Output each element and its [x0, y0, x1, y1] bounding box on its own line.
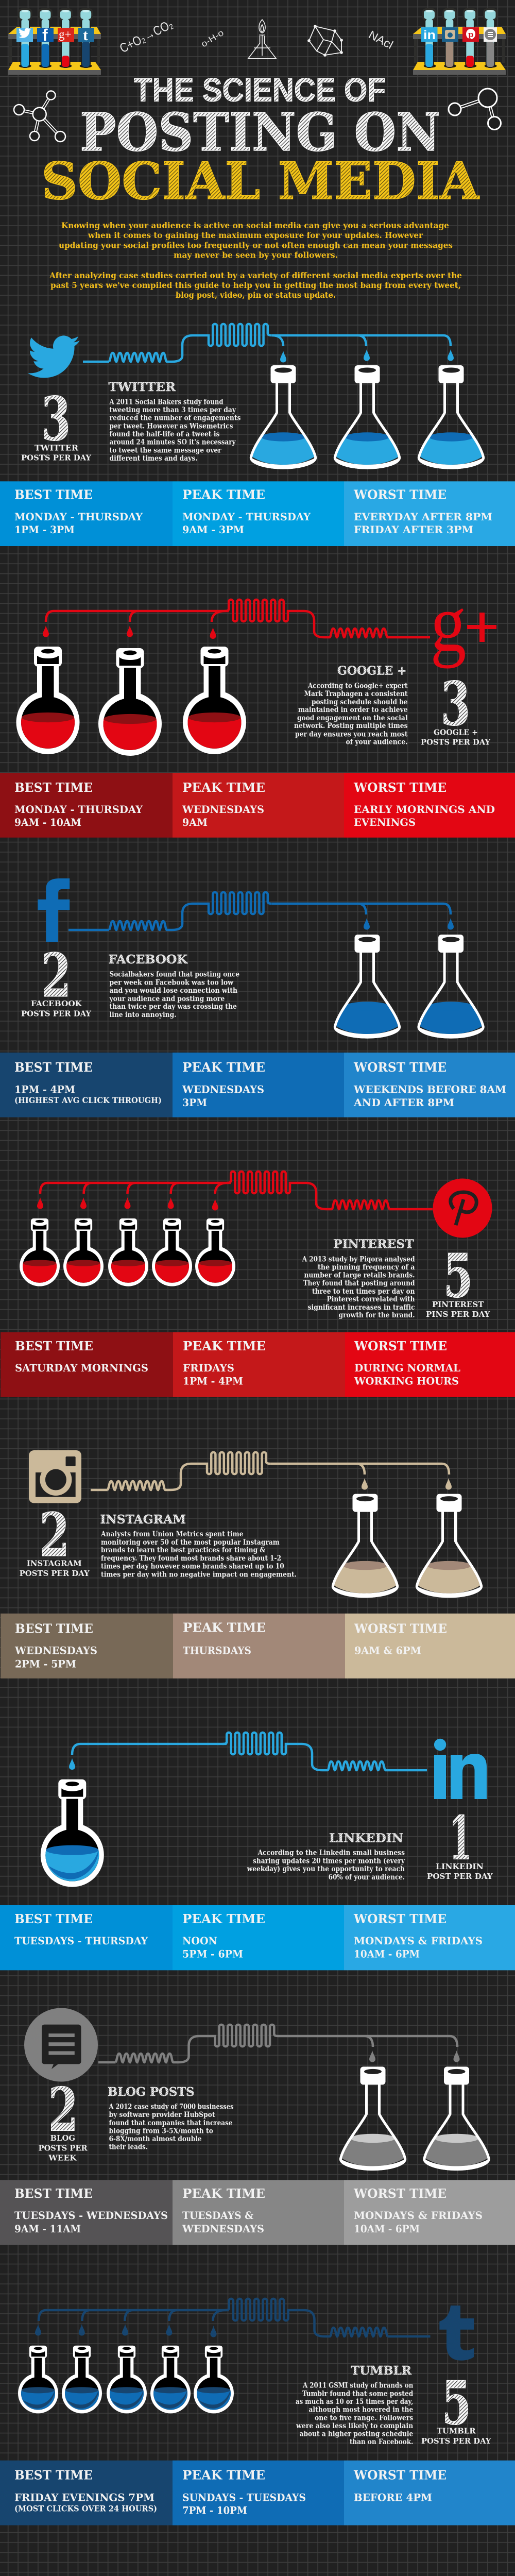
round flasks — [20, 1218, 235, 1286]
timing band: 9AM - 3PM — [182, 524, 244, 536]
body text: A 2011 GSMI study of brands on — [302, 2382, 413, 2390]
chalk doodle: combustion equation: C+O₂→CO₂ — [117, 17, 176, 56]
timing band: 7PM - 10PM — [182, 2504, 247, 2516]
icon: right test tube rack — [413, 8, 506, 75]
timing band: WORST TIME — [354, 1621, 447, 1636]
timing band: (MOST CLICKS OVER 24 HOURS) — [14, 2503, 157, 2513]
body text: 6-8X/month almost double — [109, 2135, 202, 2143]
timing band: (HIGHEST AVG CLICK THROUGH) — [14, 1095, 162, 1105]
timing band: FRIDAY EVENINGS 7PM — [14, 2492, 154, 2503]
body text: reduced the number of engagements — [109, 414, 241, 422]
body text: as much as 10 or 15 times per day, — [296, 2398, 413, 2406]
round flasks — [18, 2346, 234, 2413]
body text: about a higher posting schedule — [300, 2430, 413, 2438]
drops — [362, 1478, 452, 1490]
stat: 5 pins per day — [426, 1241, 490, 1319]
body text: three to ten times per day on — [312, 1287, 415, 1296]
timing band: THURSDAYS — [183, 1645, 251, 1656]
drops — [280, 349, 454, 363]
icon: right test tube rack: in — [423, 28, 436, 42]
timing band: BEST TIME — [14, 487, 93, 502]
coil tube — [83, 324, 451, 362]
body text: significant increases in traffic — [308, 1303, 415, 1312]
body text — [109, 971, 239, 1019]
drops — [35, 2324, 216, 2337]
drops — [364, 918, 454, 929]
timing band: WORST TIME — [353, 1060, 447, 1075]
stat: 3 posts per day: 3 — [41, 384, 71, 454]
body text: A 2013 study by Piqora analysed — [302, 1255, 415, 1263]
icon: google plus — [431, 577, 496, 669]
icon: tumblr t — [439, 2306, 474, 2361]
body text: their leads. — [109, 2143, 148, 2151]
panel: linkedin — [0, 1733, 515, 1970]
timing band: BEST TIME — [14, 780, 93, 795]
icon: left test tube rack: t — [83, 27, 88, 44]
body text: by software provider HubSpot — [109, 2111, 215, 2119]
flasks — [334, 935, 485, 1039]
stat: 5 posts per day — [421, 2368, 491, 2446]
body text: Pinterest correlated with — [327, 1295, 415, 1303]
timing band: 9AM - 10AM — [14, 817, 81, 828]
intro text block: blog post, video, pin or status update. — [176, 290, 336, 300]
timing band — [1, 1332, 515, 1397]
icon: pinterest — [433, 1179, 492, 1238]
panel: twitter — [0, 324, 515, 546]
stat: 2 posts per day — [21, 941, 91, 1018]
body text: Analysts from Union Metrics spent time — [100, 1530, 244, 1538]
timing band: SUNDAYS - TUESDAYS — [182, 2492, 306, 2503]
panel: header illustration — [8, 8, 506, 142]
timing band: BEST TIME — [14, 1911, 93, 1926]
timing band: WORST TIME — [353, 2186, 447, 2201]
body text: per week on Facebook was too low — [109, 978, 233, 987]
body text: were also less likely to complain — [296, 2422, 413, 2430]
body text: different times and days. — [109, 454, 198, 463]
body text: brands to learn the best practices for timing & — [101, 1546, 265, 1554]
body text: than twice per day was crossing the — [109, 1003, 237, 1011]
body text: monitoring over 50 of the most popular Instagram — [101, 1538, 280, 1547]
timing band: EARLY MORNINGS AND — [354, 804, 495, 816]
timing band: WORST TIME — [353, 2468, 447, 2483]
stat: 5 pins per day: PINTEREST — [432, 1300, 484, 1309]
drops — [369, 2050, 459, 2062]
timing band: NOON — [182, 1935, 217, 1947]
timing band: 3PM — [182, 1097, 207, 1109]
timing band: WORST TIME — [353, 1911, 447, 1926]
stat: 3 posts per day: 3 — [441, 669, 470, 739]
timing band: 9AM - 11AM — [14, 2223, 81, 2235]
body text — [109, 2103, 234, 2151]
timing band: 5PM - 6PM — [182, 1948, 243, 1960]
timing band: BEST TIME — [14, 2468, 93, 2483]
icon: google plus: g — [431, 577, 467, 669]
timing band: 1PM - 3PM — [14, 524, 75, 536]
timing band: PEAK TIME — [182, 1060, 265, 1075]
stat: 3 posts per day: GOOGLE + — [434, 727, 478, 737]
timing band — [0, 481, 515, 546]
stat: 5 posts per day: 5 — [442, 2368, 471, 2438]
body text: growth for the brand. — [339, 1311, 415, 1319]
body text: Mark Traphagen a consistent — [304, 690, 408, 698]
panel: pinterest — [1, 1172, 515, 1397]
stat: 3 posts per day: POSTS PER DAY — [21, 453, 91, 462]
timing band — [1, 1614, 515, 1679]
body text: one to five range. Followers — [315, 2414, 414, 2422]
intro text block: past 5 years we've compiled this guide to help you in getting the most bang from every tweet, — [50, 280, 461, 290]
timing band: BEST TIME — [14, 2186, 93, 2201]
timing band: PEAK TIME — [183, 1620, 266, 1635]
coil tube — [39, 2299, 431, 2336]
body text: Tumblr found that some posted — [302, 2389, 414, 2398]
timing band: SATURDAY MORNINGS — [15, 1362, 148, 1374]
stat: 2 blog posts per week: POSTS PER — [39, 2143, 88, 2153]
stat: 3 posts per day: POSTS PER DAY — [421, 738, 490, 747]
stat: 2 blog posts per week: WEEK — [48, 2154, 77, 2163]
timing band: DURING NORMAL — [354, 1362, 460, 1374]
timing band: EVENINGS — [354, 817, 416, 828]
timing band: BEST TIME — [14, 1060, 93, 1075]
body text: your audience and posting more — [109, 995, 225, 1003]
intro text block: when it comes to gaining the maximum exposure for your updates. However — [88, 230, 423, 240]
heading: facebook: FACEBOOK — [108, 953, 188, 967]
stat: 2 posts per day: INSTAGRAM — [27, 1559, 82, 1568]
title — [41, 71, 479, 211]
round flask — [41, 1780, 104, 1887]
body text: line into annoying. — [109, 1011, 176, 1019]
stat: 1 post per day: 1 — [449, 1804, 472, 1874]
timing band: WEDNESDAYS — [14, 1645, 97, 1656]
coil tube — [46, 600, 430, 637]
stat: 2 posts per day: 2 — [39, 1500, 70, 1570]
stat: 5 pins per day: 5 — [443, 1241, 473, 1311]
timing band — [0, 773, 515, 838]
stat: 2 posts per day: FACEBOOK — [31, 999, 82, 1008]
coil tube — [68, 892, 451, 930]
body text: They found that posting around — [303, 1279, 415, 1287]
stat: 3 posts per day — [21, 384, 91, 462]
timing band — [0, 2180, 515, 2245]
timing band: WEEKENDS BEFORE 8AM — [353, 1083, 506, 1095]
chalk doodle: NaCl: NAcl — [367, 28, 396, 52]
timing band: WORKING HOURS — [354, 1376, 459, 1387]
timing band: BEST TIME — [15, 1621, 93, 1636]
intro text block: After analyzing case studies carried out by a variety of different social media experts over the — [49, 270, 462, 280]
timing band: BEST TIME — [15, 1338, 93, 1353]
body text: A 2011 Social Bakers study found — [109, 398, 224, 406]
panel: tumblr — [0, 2299, 515, 2526]
title: SOCIAL MEDIA — [41, 151, 479, 211]
timing band: WORST TIME — [353, 780, 447, 795]
timing band: WORST TIME — [354, 1338, 447, 1353]
timing band: 1PM - 4PM — [14, 1083, 75, 1095]
drop — [69, 1758, 75, 1770]
timing band: PEAK TIME — [182, 2468, 265, 2483]
coil tube — [72, 1733, 427, 1770]
timing band: TUESDAYS - THURSDAY — [14, 1935, 148, 1947]
timing band — [0, 1905, 515, 1970]
chalk doodle: flask and flame — [248, 20, 276, 59]
body text: although most hovered in the — [309, 2406, 413, 2414]
heading: google plus: GOOGLE + — [337, 664, 407, 678]
body text: posting schedule should be — [312, 698, 408, 706]
body text: 60% of your audience. — [329, 1873, 405, 1882]
timing band: 9AM — [182, 817, 208, 828]
timing band: PEAK TIME — [182, 487, 265, 502]
body text: to tweet the same message over — [109, 446, 221, 454]
timing band: FRIDAYS — [183, 1362, 234, 1374]
stat: 2 blog posts per week: BLOG — [50, 2133, 75, 2143]
timing band: MONDAY - THURSDAY — [182, 511, 311, 523]
stat: 1 post per day — [427, 1804, 493, 1881]
timing band: 10AM - 6PM — [354, 1948, 420, 1960]
body text: network. Posting multiple times — [294, 722, 408, 730]
body text: tweeting more than 3 times per day — [109, 406, 236, 414]
stat: 5 pins per day: PINS PER DAY — [426, 1310, 490, 1319]
chalk doodle: left molecule — [14, 91, 65, 142]
icon: left test tube rack: f — [42, 26, 48, 44]
coil tube — [98, 2025, 457, 2062]
body text: According to Google+ expert — [307, 682, 408, 690]
stat: 3 posts per day — [421, 669, 490, 747]
timing band: AND AFTER 8PM — [353, 1097, 454, 1109]
body text: number of large retails brands. — [304, 1271, 415, 1279]
body text: around 24 minutes SO it's necessary — [109, 438, 236, 447]
stat: 2 blog posts per week — [39, 2075, 88, 2163]
body text — [247, 1849, 405, 1882]
timing band: WORST TIME — [353, 487, 447, 502]
flasks — [332, 1494, 483, 1598]
title: POSTING ON — [80, 101, 440, 163]
timing band: 9AM & 6PM — [354, 1645, 421, 1656]
stat: 2 posts per day: POSTS PER DAY — [20, 1569, 90, 1578]
body text: times per day with no negative impact on engagement. — [101, 1570, 297, 1579]
stat: 2 posts per day — [20, 1500, 90, 1578]
stat: 5 posts per day: TUMBLR — [437, 2426, 476, 2435]
heading: blog posts: BLOG POSTS — [108, 2085, 195, 2099]
drops — [37, 1197, 218, 1211]
timing band: MONDAYS & FRIDAYS — [354, 1935, 483, 1947]
body text — [100, 1530, 297, 1579]
stat: 2 posts per day: 2 — [41, 941, 71, 1011]
icon: right test tube rack: p — [468, 30, 474, 39]
icon: facebook f — [38, 878, 70, 942]
timing band: MONDAY - THURSDAY — [14, 804, 143, 816]
icon: blog speech bubble — [24, 2008, 98, 2081]
body text: per day ensures you reach most — [295, 730, 408, 738]
timing band: TUESDAYS & — [182, 2210, 253, 2222]
round flasks — [16, 647, 246, 756]
chalk doodle: right molecule — [449, 89, 501, 130]
stat: 5 posts per day: POSTS PER DAY — [421, 2436, 491, 2446]
timing band: FRIDAY AFTER 3PM — [354, 524, 473, 536]
body text: A 2012 case study of 7000 businesses — [109, 2103, 234, 2111]
panel: instagram — [1, 1450, 515, 1679]
panel: blog posts — [0, 2008, 515, 2245]
heading: instagram: INSTAGRAM — [100, 1513, 186, 1527]
chalk doodle: water molecule: o-H-o — [199, 28, 226, 49]
intro text block — [49, 221, 462, 300]
timing band: MONDAY - THURSDAY — [14, 511, 143, 523]
intro text block: may never be seen by your followers. — [174, 250, 338, 260]
flasks — [339, 2066, 490, 2171]
timing band: 10AM - 6PM — [354, 2223, 420, 2235]
body text: blogging from 3-5X/month to — [109, 2127, 213, 2135]
intro text block: updating your social profiles too frequently or not often enough can mean your messages — [59, 241, 453, 250]
body text — [296, 2382, 414, 2446]
icon: linkedin — [434, 1739, 487, 1799]
coil tube — [91, 1452, 449, 1490]
body text: per tweet. However as Wisemetrics — [109, 422, 233, 430]
title: THE SCIENCE OF — [134, 71, 386, 108]
body text: frequency. They found most brands share about 1-2 — [101, 1554, 281, 1563]
body text: Socialbakers found that posting once — [109, 971, 239, 979]
timing band: MONDAYS & FRIDAYS — [354, 2210, 483, 2222]
body text: found the half-life of a tweet is — [109, 430, 220, 438]
body text: the pinning frequency of a — [318, 1263, 415, 1272]
panel: facebook — [0, 878, 515, 1117]
heading: linkedin: LINKEDIN — [329, 1832, 403, 1845]
stat: 2 blog posts per week: 2 — [48, 2075, 78, 2145]
body text: found that companies that increase — [109, 2119, 233, 2127]
coil tube — [40, 1172, 433, 1209]
heading: tumblr: TUMBLR — [351, 2364, 412, 2378]
timing band — [0, 2461, 515, 2526]
chalk doodle: hexagon molecule — [308, 25, 342, 56]
panel: google plus — [0, 577, 515, 838]
timing band: EVERYDAY AFTER 8PM — [354, 511, 492, 523]
icon: left test tube rack — [8, 8, 101, 75]
timing band: PEAK TIME — [182, 780, 265, 795]
stat: 1 post per day: POST PER DAY — [427, 1872, 493, 1881]
body text: good engagement on the social — [297, 714, 408, 722]
stat: 1 post per day: LINKEDIN — [436, 1862, 484, 1871]
body text: than on Facebook. — [350, 2438, 413, 2446]
heading: pinterest: PINTEREST — [333, 1238, 414, 1251]
body text: weekday) gives you the opportunity to reach — [247, 1865, 405, 1873]
timing band: 1PM - 4PM — [183, 1376, 243, 1387]
intro text block: Knowing when your audience is active on social media can give you a serious advantage — [61, 221, 449, 230]
icon: left test tube rack: g+ — [59, 28, 71, 41]
timing band: WEDNESDAYS — [182, 2223, 264, 2235]
timing band: TUESDAYS - WEDNESDAYS — [14, 2210, 168, 2222]
timing band: PEAK TIME — [182, 1911, 265, 1926]
timing band — [0, 1053, 515, 1117]
body text — [294, 682, 408, 747]
icon: instagram camera — [29, 1450, 81, 1503]
timing band: WEDNESDAYS — [182, 1083, 264, 1095]
heading: twitter: TWITTER — [108, 380, 176, 394]
timing band: BEFORE 4PM — [354, 2492, 432, 2503]
body text: According to the Linkedin small business — [258, 1849, 405, 1857]
timing band: 2PM - 5PM — [15, 1658, 76, 1670]
drops — [43, 625, 216, 639]
body text: sharing updates 20 times per month (every — [253, 1857, 405, 1865]
body text: of your audience. — [346, 738, 408, 747]
stat: 3 posts per day: TWITTER — [35, 443, 79, 452]
timing band: PEAK TIME — [183, 1338, 266, 1353]
body text — [109, 398, 241, 463]
flasks — [250, 365, 485, 469]
body text: times per day however some brands shared up to 10 — [101, 1563, 284, 1571]
body text: maintained in order to achieve — [298, 706, 408, 714]
body text: and you would lose connection with — [109, 987, 237, 995]
timing band: PEAK TIME — [182, 2186, 265, 2201]
icon: twitter bird — [28, 335, 80, 378]
body text — [302, 1255, 415, 1319]
timing band: WEDNESDAYS — [182, 804, 264, 816]
stat: 2 posts per day: POSTS PER DAY — [21, 1009, 91, 1018]
